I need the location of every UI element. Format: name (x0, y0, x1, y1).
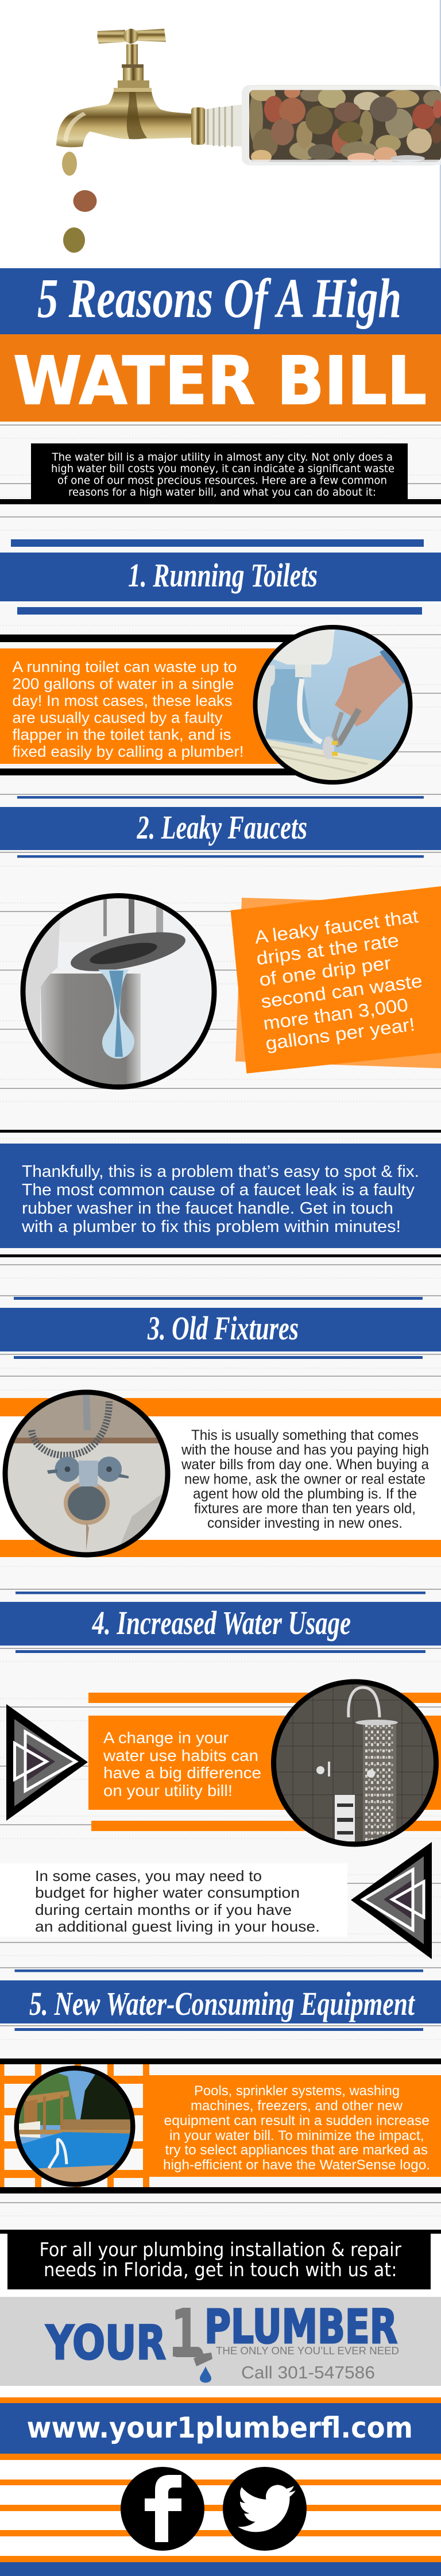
intro text panel: of one of our most precious resources. Here are a few common (57, 474, 387, 487)
panel: budget text (0, 1863, 347, 1937)
text: change in water use: have a big difference (103, 1764, 261, 1782)
panel: budget text: an additional guest living in your house. (35, 1918, 320, 1935)
call to action box: For all your plumbing installation & repair (39, 2238, 401, 2261)
text: old fixtures: This is usually something that comes (191, 1427, 419, 1443)
text: new equipment: in your water bill. To minimize the impact, (169, 2128, 424, 2144)
panel: increased water usage (0, 1679, 441, 1959)
text: running toilet (13, 658, 243, 760)
text: running toilet: are usually caused by a faulty (13, 709, 223, 726)
social stripes (0, 2480, 441, 2562)
call to action box: needs in Florida, get in touch with us at: (44, 2258, 397, 2281)
website band: www.your1plumberfl.com (26, 2411, 413, 2444)
text: new equipment (163, 2083, 430, 2173)
callout: leaky faucet statistic: of one drip per (258, 952, 392, 990)
panel: faucet fix text: The most common cause of a faucet leak is a faulty (22, 1181, 415, 1199)
photo: dripping faucet (21, 893, 217, 1090)
bottle of coins (205, 85, 441, 165)
panel: faucet fix text (0, 1144, 441, 1248)
callout: leaky faucet statistic: gallons per year! (264, 1014, 416, 1054)
text: old fixtures: new home, ask the owner or real estate (184, 1472, 425, 1488)
callout: leaky faucet statistic: more than 3,000 (262, 994, 409, 1034)
text: old fixtures: agent how old the plumbing is. If the (193, 1486, 417, 1502)
icon: right triangle arrow (351, 1842, 432, 1959)
rule (0, 1254, 441, 1257)
orange lattice (0, 2064, 149, 2187)
intro text panel: The water bill is a major utility in almost any city. Not only does a (52, 451, 393, 464)
photo: old corroded tub fixture (2, 1389, 170, 1558)
illustration: brass faucet with bottle of coins (56, 29, 441, 165)
faucet body (56, 29, 205, 147)
photo: backyard swimming pool (14, 2065, 136, 2188)
intro text panel: reasons for a high water bill, and what you can do about it: (68, 486, 376, 499)
panel: faucet fix text: rubber washer in the faucet handle. Get in touch (22, 1199, 393, 1218)
heading: 2. Leaky Faucets (0, 796, 441, 858)
heading: 3. Old Fixtures (0, 1297, 441, 1359)
icon: facebook (121, 2467, 204, 2551)
text: new equipment: equipment can result in a sudden increase (164, 2113, 430, 2129)
heading: 1. Running Toilets: 1. Running Toilets (128, 557, 318, 594)
text: new equipment: Pools, sprinkler systems, washing (194, 2083, 400, 2099)
text: running toilet: day! In most cases, these leaks (13, 692, 233, 709)
panel: faucet fix text: with a plumber to fix this problem within minutes! (21, 1218, 401, 1236)
text: running toilet: flapper in the toilet tank, and is (13, 726, 231, 743)
text: change in water use: on your utility bill! (103, 1782, 233, 1799)
text: change in water use (103, 1729, 261, 1799)
panel: new equipment (0, 2059, 441, 2193)
text: new equipment: machines, freezers, and other new (191, 2098, 403, 2114)
text: old fixtures: water bills from day one. When buying a (181, 1457, 429, 1473)
panel: running toilets (0, 625, 413, 785)
text: change in water use: water use habits can (103, 1747, 258, 1764)
heading: 4. Increased Water Usage (0, 1592, 441, 1653)
icon: twitter (223, 2467, 307, 2551)
icon: left triangle arrow (6, 1704, 88, 1821)
panel: faucet fix text: Thankfully, this is a problem that’s easy to spot & fix. (22, 1163, 419, 1181)
callout: leaky faucet statistic: second can waste (260, 970, 423, 1012)
heading: 5. New Water-Consuming Equipment (0, 1969, 441, 2031)
text: new equipment: try to select appliances that are marked as (165, 2142, 428, 2158)
panel: budget text: during certain months or if you have (35, 1901, 292, 1918)
panel: budget text: budget for higher water consumption (35, 1884, 300, 1901)
text: old fixtures: consider investing in new ones. (207, 1515, 403, 1531)
website band (0, 2397, 441, 2460)
callout: leaky faucet statistic: drips at the rate (255, 930, 400, 969)
callout: leaky faucet statistic (231, 886, 441, 1073)
photo: shower (271, 1679, 439, 1847)
call to action box (0, 2230, 441, 2297)
logo: Your 1 Plumber: YOUR (45, 2316, 166, 2370)
text: running toilet: fixed easily by calling a plumber! (13, 743, 243, 760)
panel: budget text: In some cases, you may need to (35, 1867, 262, 1884)
text: change in water use: A change in your (103, 1729, 229, 1747)
text: old fixtures: with the house and has you paying high (181, 1442, 429, 1458)
heading: 4. Increased Water Usage: 4. Increased Water Usage (92, 1604, 351, 1642)
intro text panel (0, 443, 441, 504)
logo: Your 1 Plumber: Call 301-547586 (241, 2362, 375, 2382)
photo: hand fixing toilet valve (253, 625, 413, 785)
logo: Your 1 Plumber: THE ONLY ONE YOU’LL EVER NEED (216, 2345, 399, 2357)
text: running toilet: A running toilet can waste up to (13, 658, 237, 675)
logo: Your 1 Plumber (0, 2296, 441, 2386)
panel: old fixtures (0, 1389, 441, 1558)
logo: Your 1 Plumber: 1 (171, 2296, 200, 2373)
icon: faucet spout and drop (173, 2347, 212, 2382)
callout: leaky faucet statistic: A leaky faucet that (253, 906, 420, 948)
icon: falling coins (62, 152, 96, 253)
footer band (0, 2562, 441, 2576)
heading: 2. Leaky Faucets: 2. Leaky Faucets (137, 809, 307, 846)
text: running toilet: 200 gallons of water in a single (13, 675, 234, 693)
intro text panel: high water bill costs you money, it can indicate a significant waste (51, 462, 394, 475)
heading: 3. Old Fixtures: 3. Old Fixtures (147, 1310, 299, 1347)
title band: WATER BILL: WATER BILL (13, 343, 427, 420)
heading: 1. Running Toilets (0, 539, 441, 615)
text: new equipment: high-efficient or have the WaterSense logo. (163, 2157, 430, 2173)
text: old fixtures: fixtures are more than ten years old, (194, 1500, 416, 1516)
text: old fixtures (181, 1427, 429, 1531)
rule (0, 1130, 441, 1133)
